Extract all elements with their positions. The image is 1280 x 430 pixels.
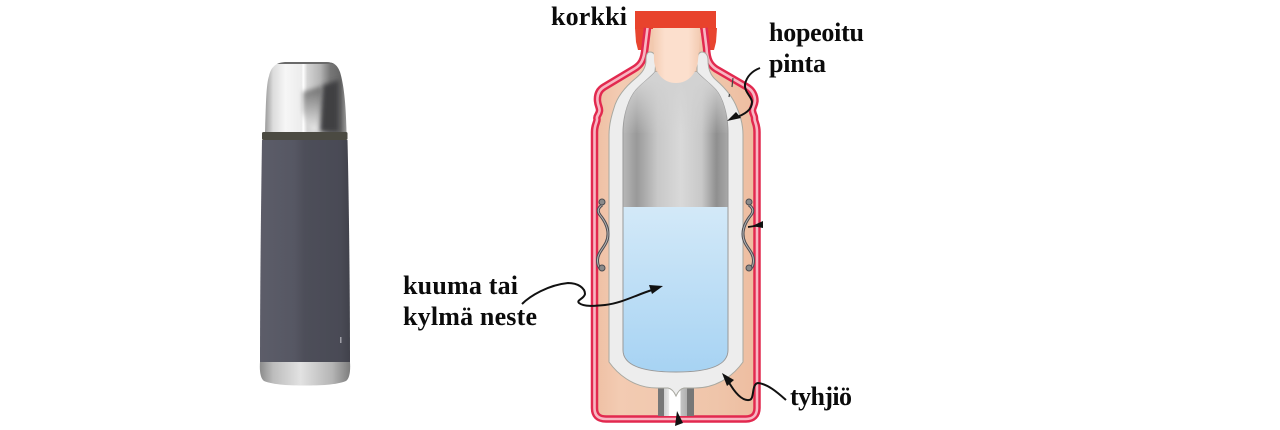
small casing marks bbox=[729, 78, 733, 97]
inner silvered chamber bbox=[623, 72, 728, 372]
label: tyhjiö: tyhjiö bbox=[790, 382, 852, 411]
outer casing walls bbox=[594, 28, 757, 419]
body highlight speck bbox=[340, 337, 342, 343]
left spring bbox=[598, 199, 608, 271]
outer casing fill bbox=[594, 28, 757, 419]
right spring bbox=[743, 199, 754, 271]
arrow: liquid bbox=[522, 283, 663, 306]
thermos body bbox=[260, 140, 350, 362]
label: hopeoitu pinta: pinta bbox=[769, 49, 826, 78]
plug bbox=[653, 28, 700, 83]
arrow: hopeoitu pinta bbox=[727, 68, 760, 121]
arrow: casing bbox=[748, 221, 763, 228]
arrow: tyhjiö bbox=[722, 373, 786, 400]
red stopper cap bbox=[635, 11, 717, 50]
evacuation stem bbox=[658, 386, 694, 416]
label: kuuma tai kylmä neste: kylmä neste bbox=[403, 302, 537, 331]
vacuum flask cross-section bbox=[594, 11, 757, 419]
label: kuuma tai kylmä neste: kuuma tai bbox=[403, 271, 518, 300]
label: korkki: korkki bbox=[551, 2, 627, 31]
thermos collar bbox=[262, 132, 348, 140]
thermos cap bbox=[265, 61, 346, 132]
thermos photo bbox=[260, 61, 350, 386]
arrow: bottom bbox=[675, 411, 683, 426]
infographic canvas bbox=[260, 6, 864, 426]
thermos base bbox=[260, 362, 350, 386]
liquid bbox=[624, 207, 728, 372]
vacuum wall bbox=[609, 52, 743, 396]
label: hopeoitu pinta: hopeoitu bbox=[769, 18, 864, 47]
label: kuuma tai kylmä neste bbox=[403, 271, 537, 331]
label: hopeoitu pinta bbox=[769, 18, 864, 78]
